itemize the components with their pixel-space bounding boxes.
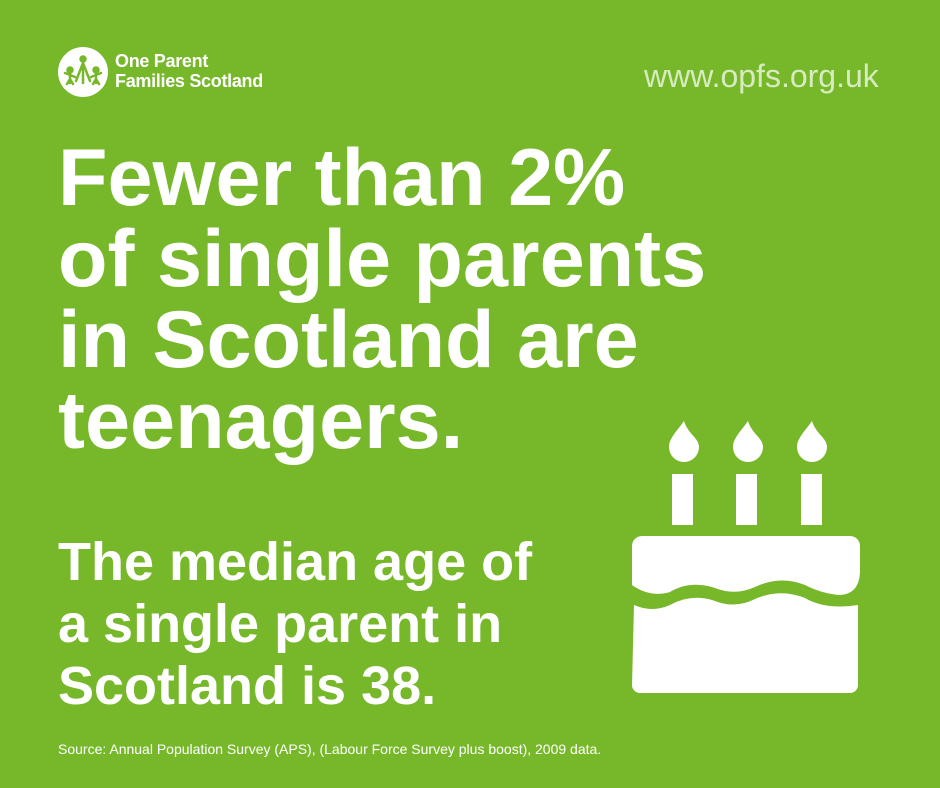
title: of single parents xyxy=(58,214,706,304)
icon: birthday cake xyxy=(632,421,860,693)
logo text: Families Scotland xyxy=(115,71,263,91)
title: teenagers. xyxy=(58,376,463,466)
logo text: One Parent xyxy=(115,51,208,71)
logo text xyxy=(115,51,263,91)
logo xyxy=(58,47,263,97)
url: www.opfs.org.uk xyxy=(644,58,879,94)
title xyxy=(58,133,706,466)
icon: logo circle with family xyxy=(58,47,108,97)
subtitle: The median age of xyxy=(58,532,532,592)
subtitle: Scotland is 38. xyxy=(58,656,436,716)
subtitle xyxy=(58,532,532,716)
subtitle: a single parent in xyxy=(58,594,502,654)
title: in Scotland are xyxy=(58,295,639,385)
title: Fewer than 2% xyxy=(58,133,625,223)
source note: Source: Annual Population Survey (APS), (Labour Force Survey plus boost), 2009 data. xyxy=(58,741,601,757)
